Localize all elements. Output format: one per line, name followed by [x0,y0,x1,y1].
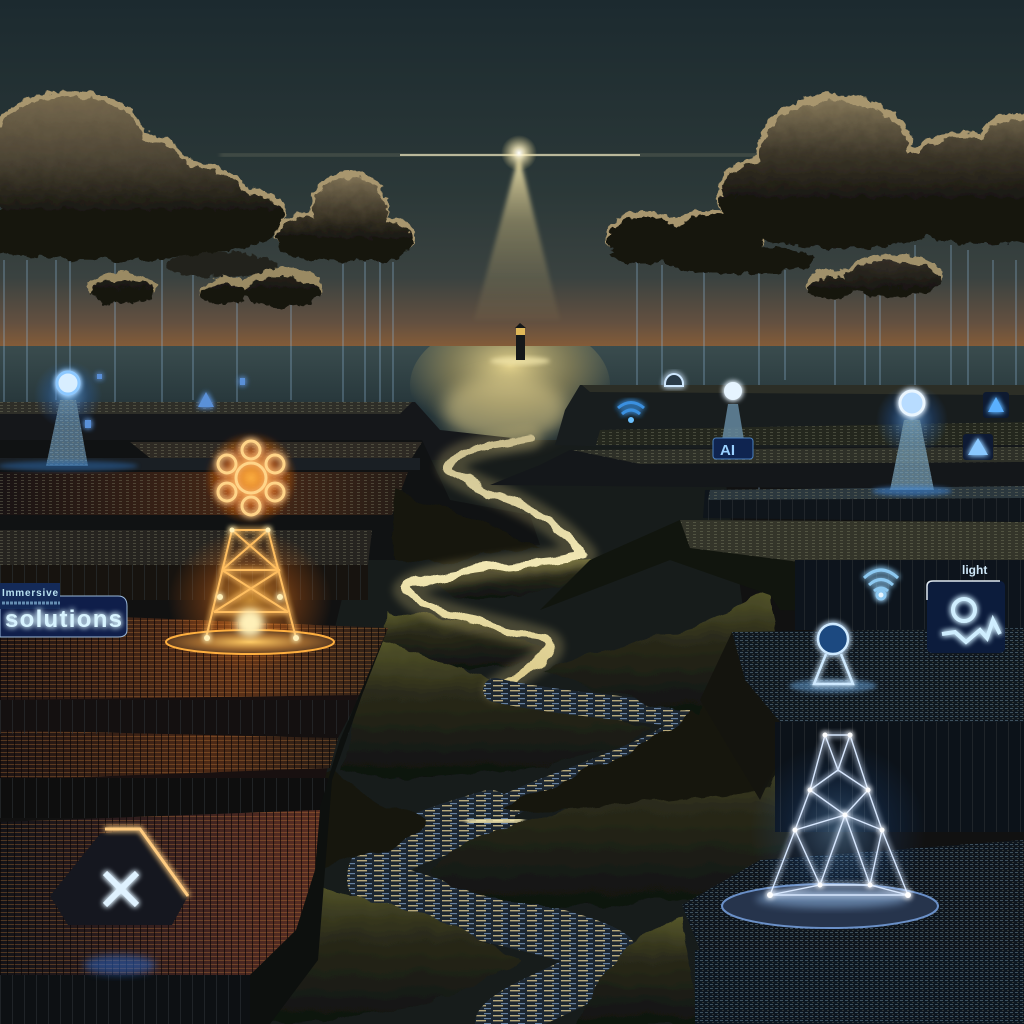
river [372,438,695,1024]
hanging light lines [4,245,1016,600]
panel: lower left tile platform [0,810,320,1024]
panel: far left terraces [0,402,540,600]
icon: X warning badge [50,828,188,975]
icon: right blue tower [872,384,952,496]
badge heading: Immersive [2,588,58,599]
small clouds left [88,253,322,307]
AI label: AI [720,442,735,459]
lighthouse [490,323,550,365]
icon: orange pylon tower [166,528,334,670]
panel: right blue tile platform [700,628,1024,832]
panel: right mid terraces [540,486,1024,630]
badge: solutions [0,583,127,637]
hills: lower valley [250,590,790,1024]
light beam and star [220,135,800,320]
sky [0,0,1024,347]
badge word: solutions [5,606,122,633]
icon: small far-left markers [85,374,245,428]
panel: large orange tile platform [0,612,388,1024]
sea [0,346,1024,440]
panel: lower right platform [682,840,1024,1024]
cloud: large upper right [606,94,1024,274]
cloud: large upper left [0,91,285,260]
valley floor [240,440,800,1024]
icon: glowing network tree [722,732,938,928]
icon: small right tower with AI badge [713,382,753,459]
icon: blue beacon [789,624,877,693]
icon: far right markers [618,374,1009,460]
cloud: mid left [275,171,416,262]
icon: network and chart card [927,581,1005,653]
label: light: light [962,563,987,577]
sunlit water [443,376,567,444]
small clouds right [806,254,942,299]
panel: central hills upper [340,490,650,776]
icon: left blue tower [0,361,138,471]
icon: wifi [864,570,898,599]
panel: far right terraces [490,385,1024,490]
icon: orange gear network [205,432,297,524]
